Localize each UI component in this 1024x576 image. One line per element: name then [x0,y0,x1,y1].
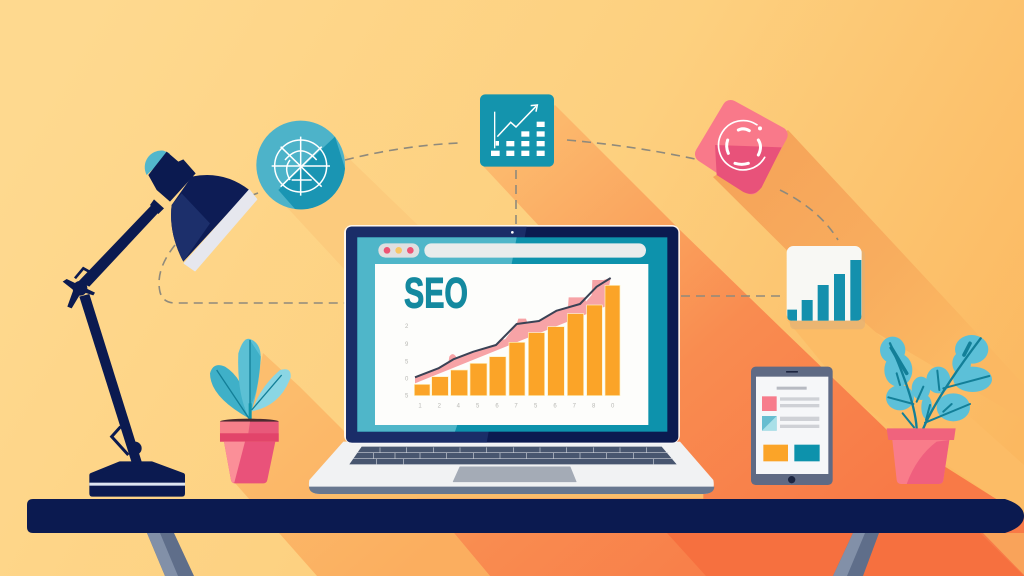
white chart page [375,264,648,425]
axis labels: 2 [438,404,442,410]
dashed connectors [159,140,838,303]
lamp head cap [145,151,170,175]
icon: target wheel circle [256,121,345,209]
lamp base [91,463,183,495]
laptop base [309,442,714,494]
camera [511,231,514,234]
laptop [309,225,714,499]
axis labels: 6 [495,404,499,410]
right potted plant [880,335,992,484]
axis labels: 2 [405,324,409,330]
diagonal long shadows [235,105,1024,576]
laptop ground shadow [320,494,703,499]
lamp shade [171,175,249,262]
axis labels: 1 [418,404,422,410]
foliage [880,335,992,421]
axis labels: 8 [592,404,596,410]
bar chart with trend line [405,278,620,410]
axis labels: 0 [405,376,409,382]
axis labels: 6 [553,404,557,410]
icon: growth chart tile [480,94,554,167]
icon: pink refresh tile [703,108,782,194]
axis labels: 0 [611,404,615,410]
screen bezel [344,225,680,443]
lamp arms [79,294,142,463]
pot [220,422,279,442]
axis labels: 9 [405,342,409,348]
axis labels: 4 [457,404,461,410]
axis labels: 5 [405,359,409,365]
leaves [210,339,291,420]
soil [220,419,279,425]
browser dots [378,243,419,258]
left potted plant [210,339,291,483]
axis labels: 7 [514,404,518,410]
table legs [147,533,879,576]
pot [887,428,956,440]
axis labels: 5 [476,404,480,410]
icon: white bar chart tile [787,246,865,329]
trackpad [453,467,576,482]
desk lamp [63,151,257,495]
address bar [424,243,646,258]
axis labels: 7 [573,404,577,410]
axis labels [405,324,615,410]
SEO heading: SEO [404,269,468,317]
table top [27,499,1024,533]
screen wallpaper [357,237,667,432]
axis labels: 5 [405,393,409,399]
keyboard [349,447,677,464]
tablet [751,367,833,485]
axis labels: 5 [534,404,538,410]
lamp shade rim [184,190,257,271]
